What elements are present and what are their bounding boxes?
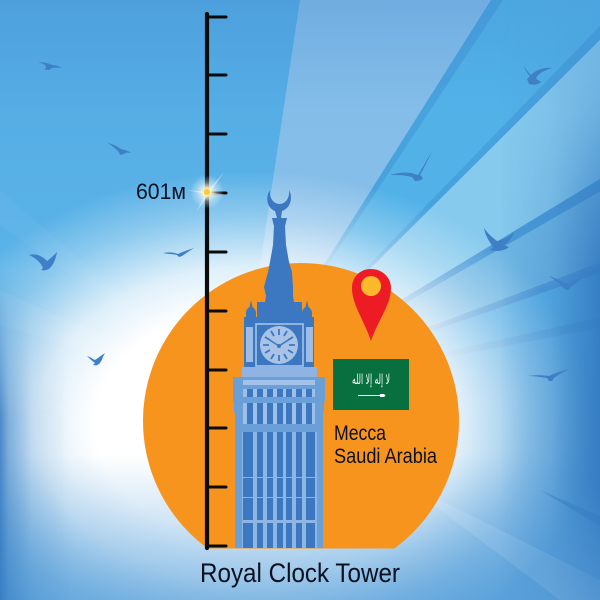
bird 7	[524, 66, 552, 85]
clock frame	[256, 324, 303, 366]
crescent finial	[267, 190, 291, 218]
sky rays	[0, 0, 600, 398]
bird 9	[549, 275, 586, 290]
location text: Mecca	[334, 422, 386, 445]
flag sword	[358, 394, 386, 397]
clock face	[260, 326, 298, 364]
location text	[334, 422, 437, 468]
orange sun circle	[143, 263, 459, 579]
pin centre	[361, 276, 381, 296]
tower cap	[242, 367, 317, 378]
flag inscription: لا إله إلا الله	[352, 372, 390, 388]
side panels	[246, 327, 313, 362]
bird 2	[108, 143, 131, 155]
bird 1	[38, 62, 62, 70]
location pin	[352, 269, 391, 341]
left pinnacle	[246, 300, 256, 320]
spire	[257, 218, 302, 317]
upper light band	[243, 380, 315, 385]
tower body	[233, 377, 325, 548]
bird 8	[484, 228, 514, 251]
height ruler	[207, 14, 226, 548]
height marker flare	[186, 172, 228, 212]
bird 4	[163, 248, 194, 257]
bird 6	[390, 151, 432, 181]
window rows	[242, 389, 317, 548]
bird 3	[29, 252, 57, 270]
location text: Saudi Arabia	[334, 445, 437, 468]
right pinnacle	[302, 300, 312, 320]
birds	[29, 62, 586, 381]
height label: 601м	[136, 179, 186, 204]
clock tower	[233, 190, 325, 548]
Saudi Arabia flag	[333, 359, 409, 410]
clock block	[244, 317, 314, 368]
bird 5	[87, 353, 105, 365]
title: Royal Clock Tower	[200, 558, 400, 588]
bird 10	[528, 369, 569, 381]
